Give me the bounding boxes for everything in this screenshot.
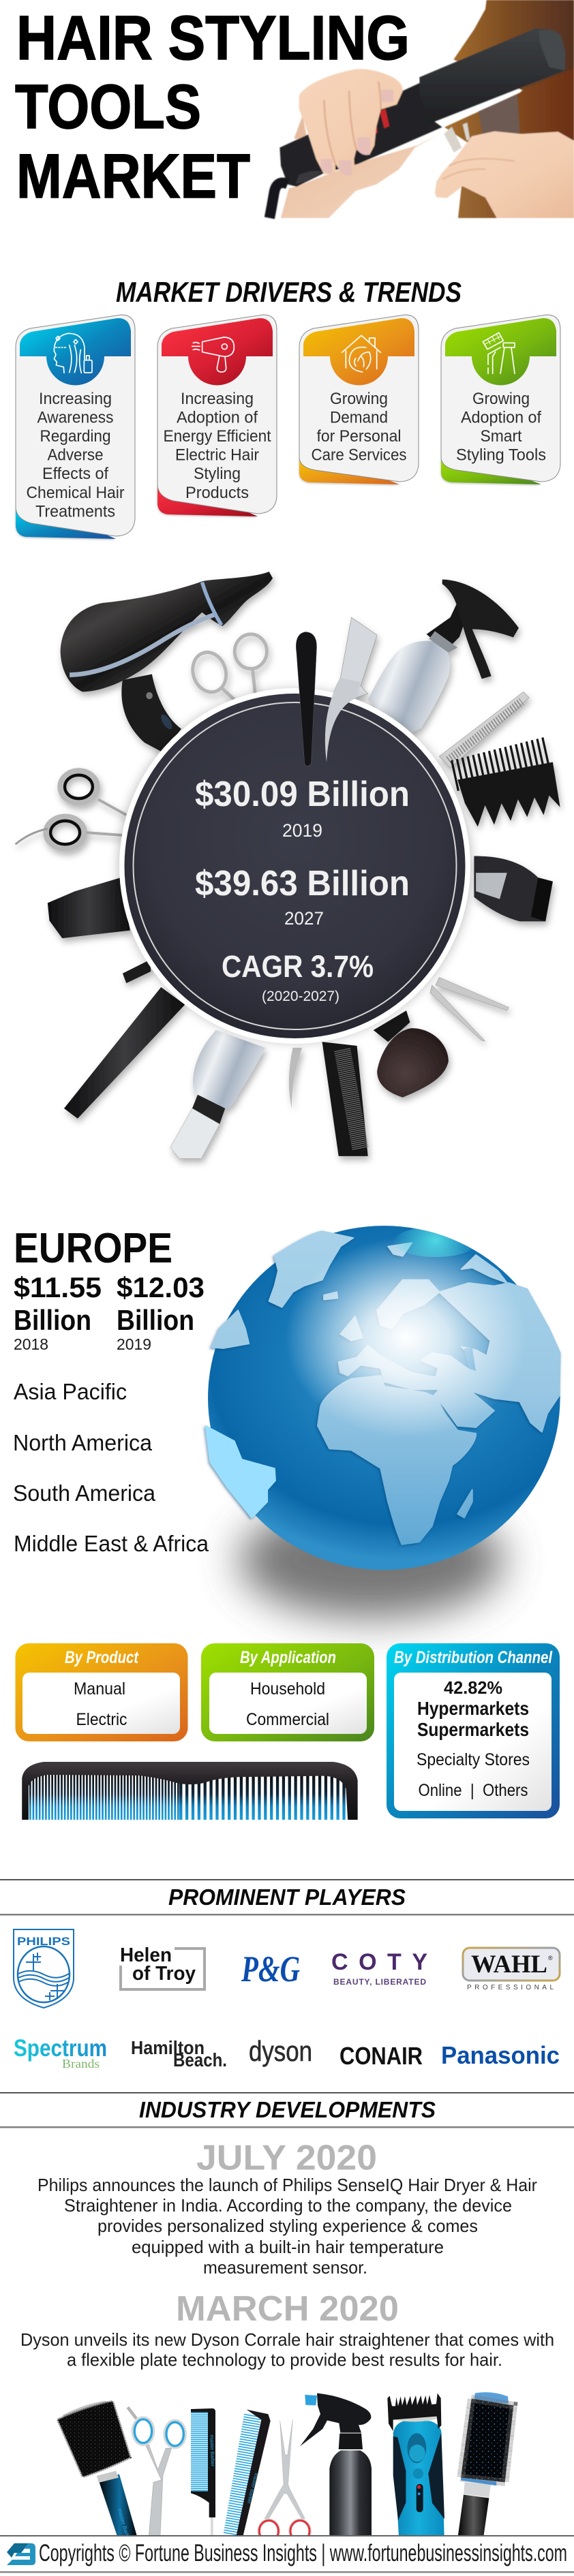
Europe 2018 value: [14, 1271, 102, 1353]
panel: by distribution channel: [387, 1643, 560, 1818]
logo: Coty: [331, 1949, 427, 1987]
UK: [340, 1316, 363, 1341]
rule: [0, 1879, 574, 1880]
tool: powder brush: [374, 1010, 449, 1098]
card: smart styling tools: [441, 315, 560, 484]
panel other channels: Online | Others: [419, 1781, 528, 1800]
red switches: [374, 108, 389, 134]
disc soft shadow: [119, 689, 472, 1042]
tool: spray bottle: [300, 2393, 372, 2536]
tool: scissors rings: [187, 634, 267, 700]
continents: [206, 1231, 560, 1545]
card text: [164, 390, 271, 502]
South America: [206, 1426, 275, 1518]
panel: by application: [201, 1643, 374, 1741]
panel items: Household: [250, 1679, 325, 1698]
hair: [444, 0, 574, 218]
title: MARKET: [16, 142, 250, 211]
tool: blue round brush: [458, 2392, 513, 2536]
logo: Panasonic: Panasonic: [441, 2041, 560, 2069]
row of styling tools: [58, 2392, 513, 2543]
Novaya Zemlya: [462, 1255, 507, 1283]
logo: Spectrum Brands: [14, 2035, 107, 2070]
tool: black bottle: [48, 878, 130, 938]
card text: Increasing: [39, 390, 112, 408]
card header: [162, 318, 273, 386]
logo: Hamilton Beach: Beach.: [173, 2049, 227, 2070]
panel leading channel: Hypermarkets: [417, 1698, 529, 1719]
title: HAIR STYLING: [16, 3, 410, 73]
panel leading channel: [417, 1698, 529, 1740]
card text: Effects of: [42, 465, 108, 483]
straightener button: [296, 171, 324, 184]
tool: angled comb: master Barber: [246, 2472, 260, 2505]
tool: silver scissors: [16, 771, 126, 848]
development: July 2020: Philips announces the launch of Philips SenseIQ Hair Dryer & Hair: [37, 2175, 537, 2195]
Europe 2019 value: [117, 1271, 205, 1353]
panel: by product: [15, 1643, 188, 1741]
straightened strand: [479, 94, 520, 138]
other regions list: North America: [13, 1430, 153, 1455]
comb spine: [22, 1762, 358, 1820]
market size disc: [119, 688, 472, 1044]
card: energy efficient tools: [157, 315, 277, 516]
card text: Adoption of: [461, 409, 541, 426]
logo: Helen of Troy: Helen: [120, 1944, 172, 1966]
logo: P&G: P&G: [241, 1949, 300, 1989]
right hand creases: [442, 159, 515, 179]
2019 value: $30.09 Billion: [195, 775, 410, 814]
right hand: [435, 131, 574, 218]
card text: Growing: [330, 390, 388, 408]
card header: [303, 318, 414, 386]
palm sliver: [294, 116, 307, 141]
tool: small clip: [123, 960, 151, 983]
title: [15, 3, 410, 211]
tool: scissor blades: [430, 977, 509, 1041]
card body: [16, 315, 135, 536]
logo: Wahl: ®: [548, 1955, 553, 1961]
Greenland: [269, 1231, 353, 1307]
development: July 2020: Straightener in India. According to the company, the device: [64, 2195, 512, 2216]
panel items: [246, 1679, 329, 1729]
card wedge: [16, 508, 116, 539]
tool: hair dryer: [61, 572, 273, 752]
card text: for Personal: [316, 427, 401, 446]
tool: beard trimmer: [474, 856, 553, 921]
Svalbard: [388, 1243, 412, 1256]
footer rule: [0, 2571, 574, 2573]
Europe 2018 value: Billion: [14, 1304, 91, 1336]
tool: tail comb: [191, 2408, 216, 2536]
comb dense teeth: [29, 1725, 179, 1867]
heading: prominent players: PROMINENT PLAYERS: [168, 1884, 406, 1910]
Europe 2019 value: 2019: [117, 1335, 151, 1353]
card text: Energy Efficient: [164, 427, 271, 446]
Scandinavia: [377, 1280, 439, 1329]
2027 value: 2027: [284, 908, 324, 929]
globe shadow: [239, 1502, 504, 1618]
tool: silver bottle: [170, 1030, 265, 1158]
lower hair: [458, 68, 574, 218]
card text: Regarding: [40, 427, 110, 446]
other regions list: [13, 1379, 209, 1556]
footer rule: [0, 2535, 574, 2536]
straightener end cap: [539, 29, 565, 70]
heated plate: [444, 123, 470, 153]
styling tools around market size disc: [16, 572, 560, 1158]
logo: Wahl: [463, 1948, 560, 1991]
development: March 2020: a flexible plate technology to provide best results for hair.: [67, 2349, 502, 2370]
tool: curling iron: [64, 987, 185, 1119]
card body: [299, 315, 419, 482]
2027 value: [195, 864, 410, 929]
card: personal care services: [299, 315, 419, 484]
finger creases: [324, 82, 381, 164]
logo: Helen of Troy: of Troy: [132, 1963, 196, 1985]
other regions list: South America: [13, 1480, 156, 1506]
tool: tweezers tip: [325, 678, 361, 762]
panel other channels: [417, 1750, 530, 1800]
tool: black hair clip: [296, 632, 317, 766]
logo: Spectrum Brands: Spectrum: [14, 2035, 107, 2062]
rule: [0, 1914, 574, 1916]
heading: industry developments: INDUSTRY DEVELOPMENTS: [139, 2097, 436, 2122]
logo: Coty: BEAUTY, LIBERATED: [333, 1977, 426, 1987]
card header: [445, 318, 556, 386]
disc rim: [119, 688, 470, 1044]
card text: Styling Tools: [456, 446, 546, 465]
card text: Styling: [194, 465, 241, 483]
logo: Wahl: PROFESSIONAL: [467, 1984, 554, 1991]
Arctic highlight: [395, 1228, 472, 1258]
tool: bottom tweezers: [289, 1048, 302, 1108]
clip and tweezers over disc: [296, 632, 361, 766]
development: July 2020: measurement sensor.: [203, 2257, 367, 2278]
other regions list: Asia Pacific: [14, 1379, 127, 1404]
card wedge: [157, 485, 258, 516]
development: March 2020: [20, 2289, 554, 2370]
icon: large comb: [22, 1762, 358, 1820]
Globe shine: [208, 1226, 560, 1570]
Africa: [318, 1376, 476, 1545]
2027 value: $39.63 Billion: [195, 864, 410, 903]
logo: Spectrum Brands: Brands: [62, 2057, 100, 2070]
2019 value: 2019: [282, 820, 322, 841]
logo: Dyson: dyson: [249, 2035, 312, 2067]
card text: Products: [185, 484, 249, 502]
logo: Hamilton Beach: [131, 2037, 227, 2070]
icon: smart styling tools: [483, 332, 515, 373]
card text: Chemical Hair: [26, 484, 125, 502]
card text: Demand: [330, 409, 388, 426]
panel list box: [209, 1673, 367, 1734]
tool: bottom comb: [322, 1042, 368, 1156]
tool: blue scissors: [127, 2407, 185, 2536]
rule: [0, 2126, 574, 2128]
Canada: [211, 1310, 249, 1348]
card text: [311, 390, 406, 465]
panel items: Manual: [74, 1679, 125, 1698]
card wedge: [299, 458, 399, 484]
disc body: [124, 694, 465, 1038]
panel share value: 42.82%: [444, 1677, 502, 1698]
tool: angled comb: [232, 2410, 271, 2536]
tool: metal tweezers top: [325, 617, 377, 762]
fingers: [299, 69, 403, 176]
nails: [321, 90, 393, 176]
panel items: Electric: [76, 1710, 127, 1729]
logo: Philips: [14, 1929, 74, 2008]
panel list box: [22, 1673, 180, 1734]
other regions list: Middle East & Africa: [14, 1531, 209, 1556]
tool: thinning comb: [439, 692, 529, 768]
card: chemical treatments awareness: [16, 315, 135, 539]
Madagascar: [457, 1490, 472, 1518]
Europe 2019 value: $12.03: [117, 1271, 205, 1303]
development: July 2020: provides personalized styling experience & comes: [97, 2216, 478, 2236]
CAGR value: (2020-2027): [262, 989, 339, 1004]
card text: Treatments: [35, 503, 115, 521]
tool: spray bottle: [368, 580, 519, 736]
logo: Philips: PHILIPS: [17, 1935, 70, 1948]
card text: Care Services: [311, 446, 406, 465]
power cable: [269, 183, 288, 218]
icon: head with hair care: [54, 333, 92, 373]
card text: Awareness: [37, 409, 113, 426]
Europe heading: EUROPE: [14, 1225, 172, 1272]
globe: [206, 1226, 560, 1570]
tool: tail comb: master Barber: [209, 2435, 216, 2467]
panel items: Commercial: [246, 1710, 329, 1729]
card text: Electric Hair: [175, 446, 259, 465]
logo: Helen of Troy: [120, 1944, 205, 1989]
Europe 2019 value: Billion: [117, 1304, 194, 1336]
Europe 2018 value: 2018: [14, 1335, 48, 1353]
panel heading: By Product: [65, 1648, 139, 1667]
heading: market drivers and trends: MARKET DRIVERS & TRENDS: [116, 276, 462, 308]
hero photo: hands using hair straightener: [269, 0, 574, 218]
straightener lower arm: [280, 83, 442, 187]
rule: [0, 2092, 574, 2093]
tool: red scissors: [258, 2420, 311, 2543]
CAGR value: CAGR 3.7%: [222, 949, 374, 984]
tool: blue hair clipper: [387, 2393, 444, 2536]
logo: Hamilton Beach: Hamilton: [131, 2037, 205, 2058]
card text: [26, 390, 125, 521]
Caspian Sea: [464, 1348, 476, 1371]
card header: [20, 318, 131, 386]
CAGR value: [222, 949, 374, 1004]
Eurasia: [339, 1283, 560, 1432]
card text: Growing: [472, 390, 530, 408]
development: July 2020: equipped with a built-in hair temperature: [132, 2237, 444, 2257]
card body: [157, 315, 277, 514]
panel other channels: Specialty Stores: [417, 1750, 530, 1769]
ocean: [208, 1226, 560, 1570]
title: TOOLS: [15, 72, 201, 142]
comb wide teeth: [179, 1725, 348, 1867]
card body: [441, 315, 560, 482]
card text: [456, 390, 546, 465]
panel items: [74, 1679, 127, 1729]
logo: Conair: CONAIR: [339, 2042, 423, 2070]
panel list box: [394, 1673, 552, 1811]
logo: Coty: COTY: [331, 1949, 427, 1975]
tool: round brush: [58, 2401, 137, 2543]
Iceland: [324, 1292, 337, 1300]
card wedge: [441, 458, 541, 484]
development: July 2020: JULY 2020: [196, 2138, 377, 2177]
footer logo: [7, 2543, 35, 2565]
2019 value: [195, 775, 410, 841]
card text: Adoption of: [177, 409, 258, 426]
card text: Increasing: [181, 390, 254, 408]
card text: Adverse: [48, 446, 104, 465]
straightener upper arm: [419, 29, 565, 124]
forearm: [281, 134, 440, 218]
card text: Smart: [480, 427, 522, 446]
icon: hair dryer: [192, 337, 234, 372]
icon: house with woman's head: [342, 335, 380, 372]
development: March 2020: MARCH 2020: [176, 2289, 399, 2329]
development: March 2020: Dyson unveils its new Dyson Corrale hair straightener that comes with: [20, 2329, 554, 2350]
development: July 2020: [37, 2138, 537, 2278]
panel heading: By Application: [240, 1648, 336, 1667]
tool: black comb: [454, 752, 560, 826]
Europe 2018 value: $11.55: [14, 1271, 102, 1303]
logo: Wahl: WAHL: [471, 1951, 547, 1978]
tool: round brush: master Barber: [117, 2508, 132, 2543]
panel leading channel: Supermarkets: [417, 1719, 529, 1740]
disc ring: [134, 702, 457, 1029]
